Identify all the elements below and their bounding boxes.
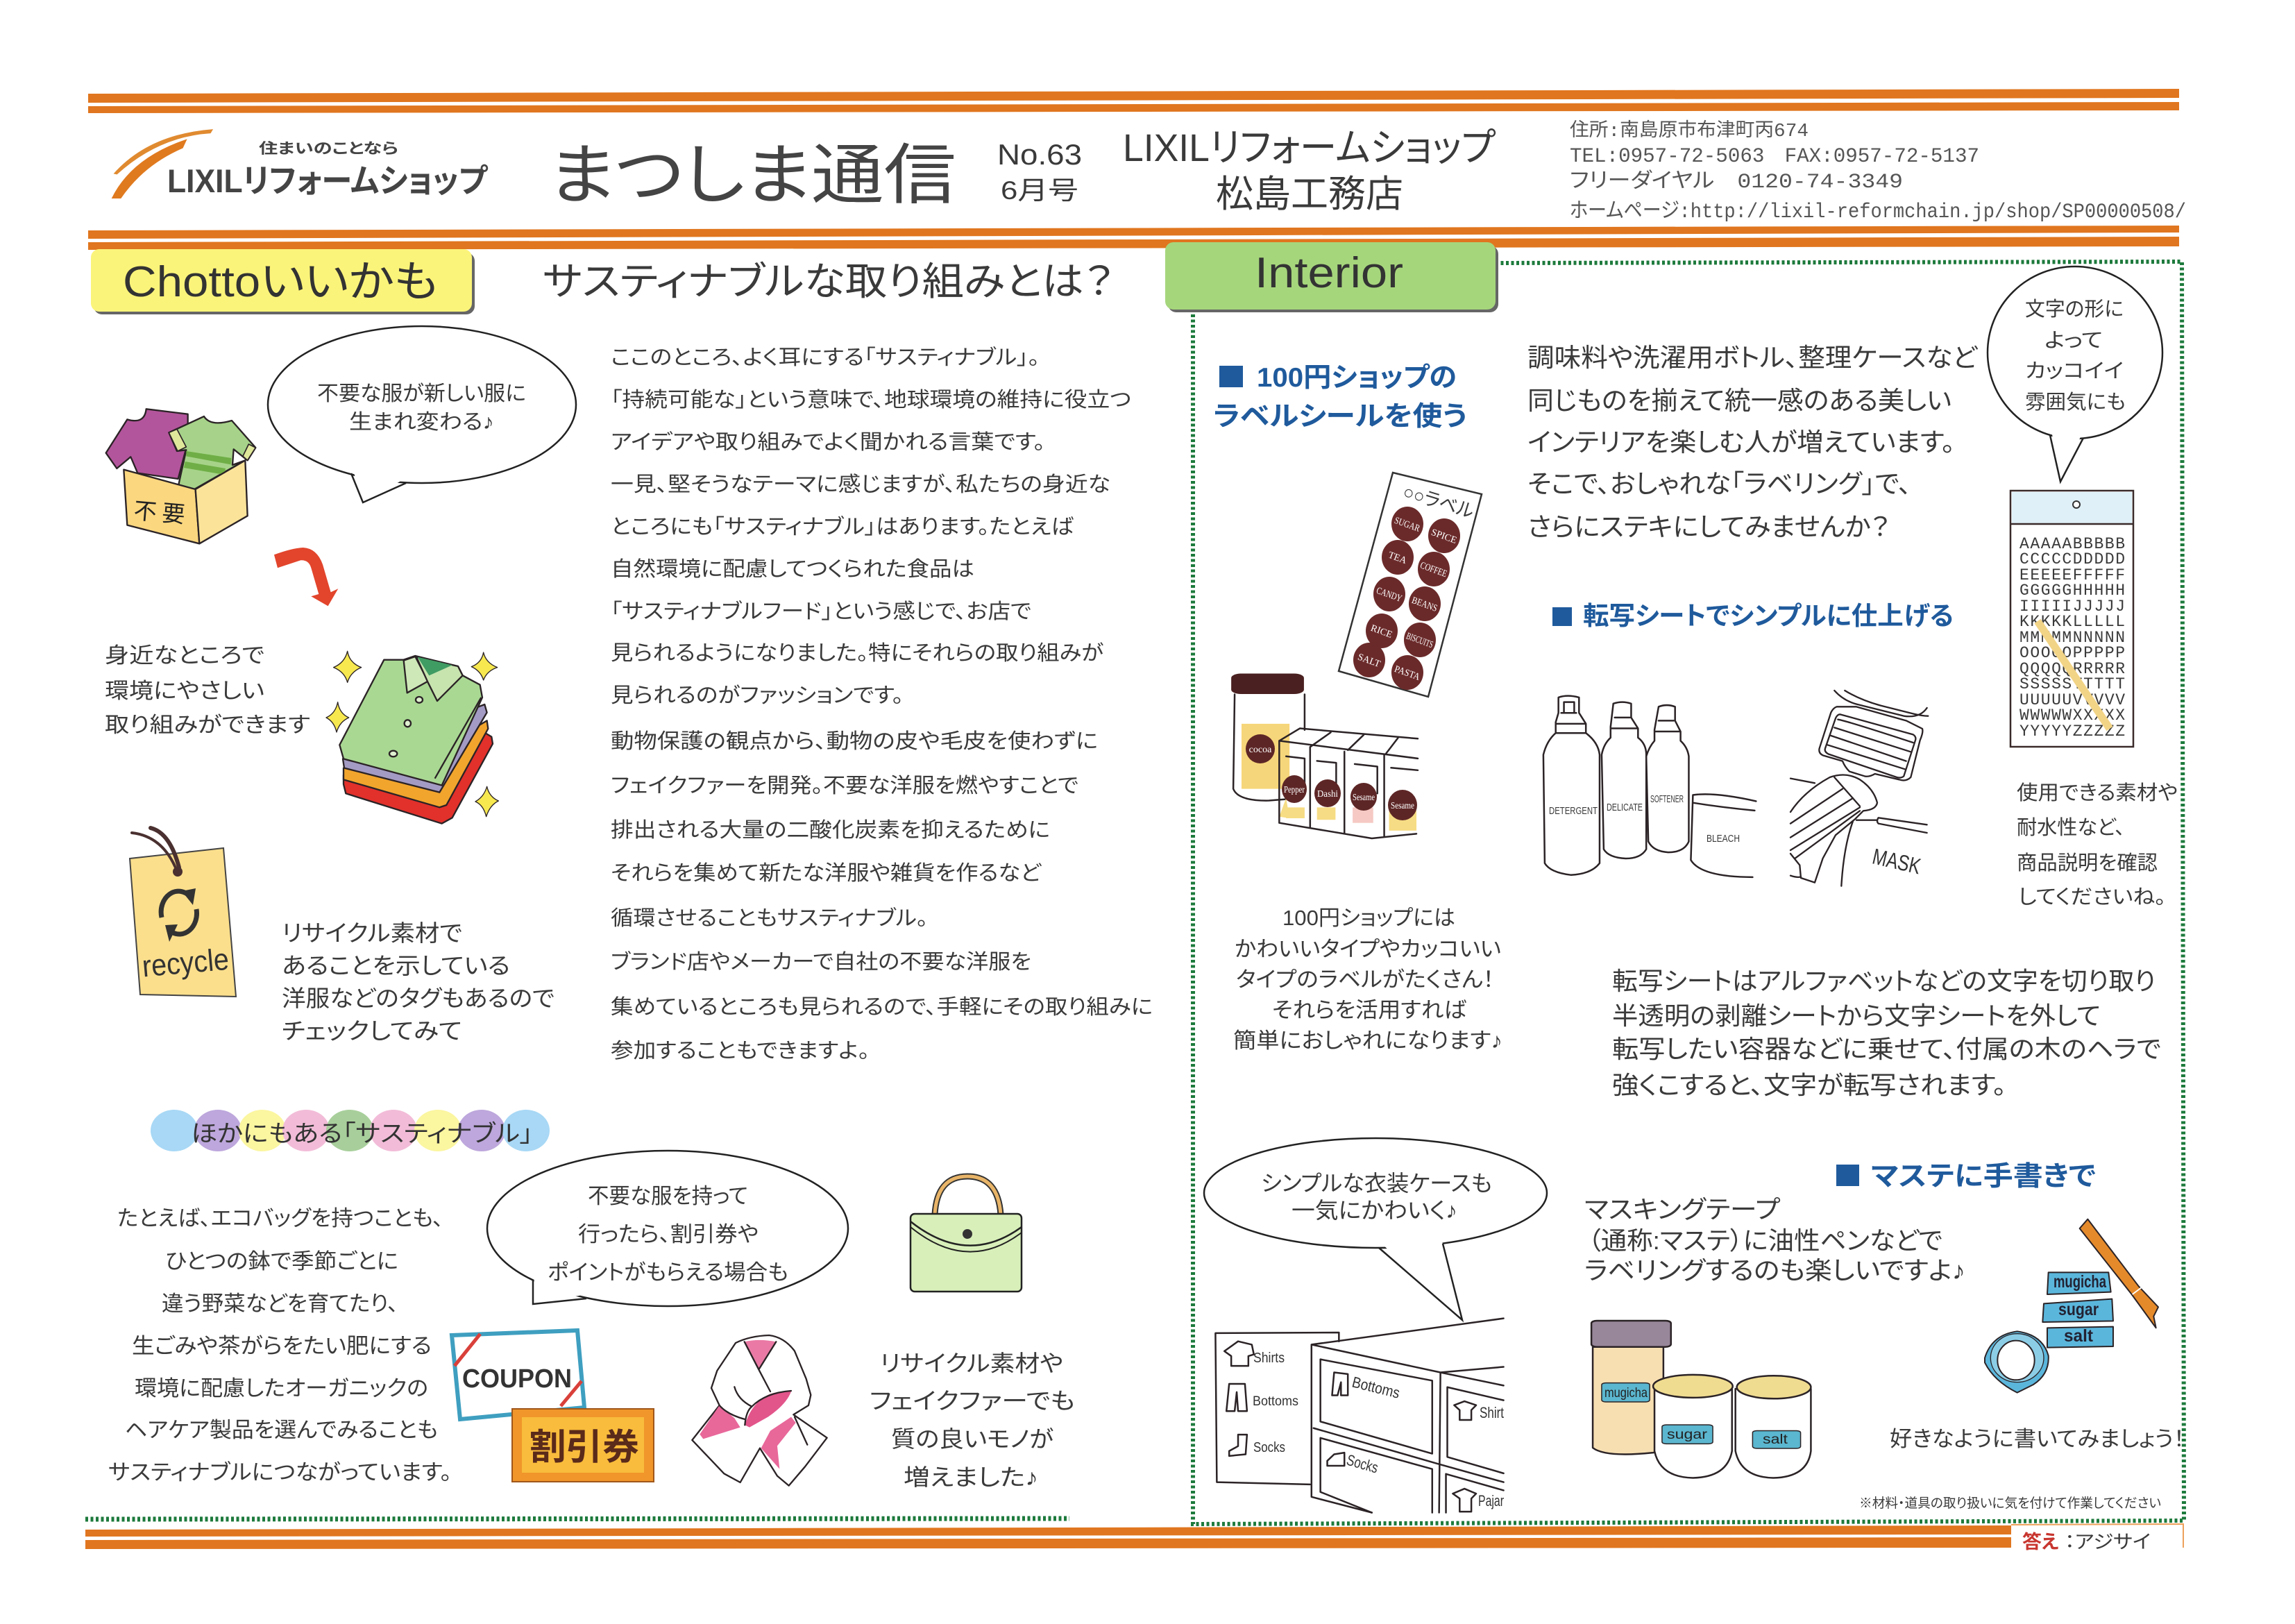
header band [88, 89, 2186, 250]
text: quality recycled goods [870, 1351, 1075, 1490]
intro text: インテリアを楽しむ人が増えています。 [1527, 428, 1955, 457]
article body text: 自然環境に配慮してつくられた食品は [611, 558, 974, 581]
dotted green frame [1193, 262, 2184, 1524]
illustration: labelled jars and boxes: Sesame [1353, 793, 1375, 803]
illustration: labelled jars and boxes [1231, 674, 1418, 838]
illustration: transfer letter sheet: OOOOOPPPPP [2019, 644, 2125, 662]
speech bubble: clothes reborn [268, 326, 576, 502]
shop name: 松島工務店 [1216, 174, 1403, 215]
article body text: フェイクファーを開発。不要な洋服を燃やすことで [611, 775, 1078, 797]
illustration: label sheet: CANDY [1375, 586, 1403, 604]
illustration: labelled jars and boxes: Pepper [1284, 785, 1305, 795]
illustration: coupon and discount ticket: 割引券 [530, 1428, 639, 1468]
speech bubble: coupons: 不要な服を持って [588, 1184, 748, 1208]
heading: 100 yen labels [1213, 363, 1467, 432]
text: 100 yen shop labels: かわいいタイプやカッコいい [1235, 937, 1501, 961]
illustration: label sheet: COFFEE [1419, 561, 1448, 580]
speech bubble: costume cases: シンプルな衣装ケースも [1261, 1171, 1492, 1196]
heading: masking tape: マステに手書きで [1871, 1162, 2096, 1192]
text: masking tape intro: （通称:マステ）に油性ペンなどで [1588, 1226, 1942, 1255]
subheading: other sustainable things: ほかにもある「サスティナブル」 [191, 1121, 533, 1147]
illustration: clothing cases with labels: Shirt [1480, 1404, 1504, 1421]
illustration: label sheet: SALT [1356, 652, 1382, 670]
intro text: さらにステキにしてみませんか？ [1527, 513, 1890, 541]
illustration: box of unwanted clothes [106, 409, 255, 543]
speech bubble: costume cases: 一気にかわいく♪ [1292, 1198, 1457, 1223]
text: other examples: ヘアケア製品を選んでみることも [125, 1418, 438, 1442]
speech bubble: costume cases [1204, 1138, 1547, 1320]
article body text: 見られるのがファッションです。 [611, 684, 904, 707]
illustration: transfer letter sheet: SSSSSTTTTT [2019, 675, 2125, 693]
illustration: detergent bottles: BLEACH [1707, 833, 1740, 845]
text: masking tape intro: ラベリングするのも楽しいですよ♪ [1584, 1256, 1965, 1285]
contact details: 住所:南島原市布津町丙674 [1570, 119, 1809, 142]
text: recycled tags: あることを示している [282, 953, 510, 979]
illustration: transfer letter sheet: UUUUUVVVVV [2019, 691, 2125, 709]
heading: 100 yen labels: ラベルシールを使う [1213, 402, 1467, 432]
heading: transfer sheet: 転写シートでシンプルに仕上げる [1583, 602, 1954, 630]
speech bubble: letter shapes [1988, 267, 2162, 482]
text: write as you like: 好きなように書いてみましょう！ [1890, 1427, 2185, 1451]
article body text: ところにも「サスティナブル」はあります。たとえば [611, 516, 1074, 539]
illustration: jars with masking tape: salt [1763, 1432, 1788, 1447]
lower orange stripes [88, 226, 2179, 250]
tab: Chottoいいかも [91, 249, 475, 314]
illustration: transfer letter sheet: AAAAABBBBB [2019, 535, 2125, 553]
text: eco-friendly nearby: 取り組みができます [105, 713, 310, 737]
text: how transfer sheets work: 転写したい容器などに乗せて、付属の木のヘラで [1612, 1035, 2161, 1063]
tab: Interior: Interior [1255, 249, 1403, 297]
illustration: clothing cases with labels: Socks [1345, 1451, 1380, 1476]
speech bubble: coupons: 行ったら、割引券や [578, 1222, 759, 1246]
text: masking tape intro [1584, 1195, 1965, 1285]
illustration: detergent bottles [1543, 696, 1756, 877]
subheading: other sustainable things [151, 1110, 550, 1151]
text: how transfer sheets work: 転写シートはアルファベットなどの文字を切り取り [1612, 967, 2156, 995]
speech bubble: letter shapes: 雰囲気にも [2025, 391, 2126, 414]
contact details: フリーダイヤル 0120-74-3349 [1570, 169, 1903, 194]
illustration: clothing cases with labels: Bottoms [1350, 1373, 1402, 1402]
footer [85, 1524, 2183, 1553]
illustration: clothing cases with labels: Pajar [1478, 1492, 1504, 1509]
issue number: 6月号 [1001, 176, 1078, 205]
article body text: 排出される大量の二酸化炭素を抑えるために [611, 819, 1050, 842]
text: quality recycled goods: フェイクファーでも [870, 1388, 1075, 1414]
illustration: clothing cases with labels: Shirts [1253, 1351, 1285, 1366]
illustration: fur scarf [692, 1335, 827, 1486]
title: まつしま通信 [548, 139, 956, 212]
intro text: 同じものを揃えて統一感のある美しい [1527, 387, 1951, 415]
article body text: 「サスティナブルフード」という感じで、お店で [611, 600, 1031, 623]
logo: LIXIL Reform Shop: LIXILリフォームショップ [167, 162, 489, 199]
speech bubble: letter shapes: カッコイイ [2025, 360, 2124, 382]
text: other examples [108, 1206, 452, 1485]
text: 100 yen shop labels: 100円ショップには [1282, 906, 1455, 930]
text: quality recycled goods: 増えました♪ [904, 1464, 1038, 1490]
article body text: 循環させることもサスティナブル。 [611, 907, 928, 930]
text: recycled tags [282, 920, 554, 1044]
illustration: tape, labels and pen: salt [2064, 1326, 2094, 1346]
illustration: recycle tag: recycle [141, 942, 230, 983]
illustration: detergent bottles: DETERGENT [1549, 805, 1598, 817]
text: check materials: 使用できる素材や [2017, 781, 2178, 804]
text: other examples: サスティナブルにつながっています。 [108, 1460, 452, 1485]
tab: Chottoいいかも: Chottoいいかも [123, 258, 438, 306]
answer box [2011, 1524, 2183, 1553]
illustration: label sheet: BEANS [1410, 595, 1439, 614]
heading: 100 yen labels: 100円ショップの [1257, 363, 1457, 393]
speech bubble: letter shapes: よって [2044, 330, 2103, 352]
note: handle materials carefully: ※材料・道具の取り扱いに気を付けて作業してください [1859, 1496, 2161, 1511]
issue number [997, 138, 1082, 205]
intro text: 調味料や洗濯用ボトル、整理ケースなど [1527, 344, 1978, 372]
text: 100 yen shop labels: それらを活用すれば [1272, 998, 1467, 1022]
article body text: ブランド店やメーカーで自社の不要な洋服を [611, 951, 1031, 974]
article body text: 一見、堅そうなテーマに感じますが、私たちの身近な [611, 473, 1110, 496]
text: recycled tags: チェックしてみて [282, 1018, 462, 1044]
panel: Chotto iikamo [85, 249, 1153, 1519]
illustration: clothing cases with labels: Bottoms [1253, 1394, 1298, 1409]
text: 100 yen shop labels: 簡単におしゃれになります♪ [1233, 1029, 1502, 1053]
text: quality recycled goods: 質の良いモノが [891, 1426, 1054, 1452]
illustration: coupon and discount ticket: COUPON [462, 1364, 572, 1394]
illustration: transfer letter sheet: WWWWWXXXXX [2019, 707, 2125, 725]
logo: LIXIL Reform Shop [112, 129, 489, 199]
article body text: それらを集めて新たな洋服や雑貨を作るなど [611, 862, 1042, 885]
illustration: label sheet: ○○ラベル [1400, 481, 1476, 523]
text: how transfer sheets work: 半透明の剥離シートから文字シートを外して [1612, 1001, 2101, 1030]
text: quality recycled goods: リサイクル素材や [880, 1351, 1063, 1376]
logo: LIXIL Reform Shop: 住まいのことなら [259, 141, 398, 157]
text: other examples: ひとつの鉢で季節ごとに [165, 1249, 398, 1274]
illustration: jars with masking tape: mugicha [1604, 1386, 1648, 1401]
illustration: tape, labels and pen [1985, 1219, 2158, 1393]
text: other examples: 違う野菜などを育てたり、 [162, 1292, 398, 1316]
illustration: label sheet [1339, 473, 1482, 697]
text: check materials [2017, 781, 2178, 908]
illustration: clothing cases with labels: Socks [1253, 1440, 1285, 1455]
text: recycled tags: リサイクル素材で [282, 920, 462, 946]
illustration: transfer letter sheet: IIIIIJJJJJ [2019, 598, 2125, 616]
contact details [1570, 119, 2186, 224]
bottom orange stripes [85, 1525, 2011, 1549]
text: other examples: 生ごみや茶がらをたい肥にする [132, 1334, 432, 1358]
text: masking tape intro: マスキングテープ [1584, 1195, 1781, 1224]
intro text [1527, 344, 1978, 541]
article body text: 見られるようになりました。特にそれらの取り組みが [611, 642, 1104, 665]
tab: Interior [1165, 242, 1498, 312]
illustration: label sheet: BISCUITS [1405, 632, 1434, 650]
article body text: 動物保護の観点から、動物の皮や毛皮を使わずに [611, 730, 1098, 753]
answer box: ：アジサイ [2065, 1532, 2151, 1553]
text: 100 yen shop labels: タイプのラベルがたくさん！ [1236, 967, 1494, 992]
illustration: labelled jars and boxes: Dashi [1317, 789, 1338, 800]
issue number: No.63 [997, 138, 1082, 171]
illustration: transfer letter sheet: EEEEEFFFFF [2019, 566, 2125, 584]
illustration: box of unwanted clothes: 不要 [133, 498, 186, 527]
illustration: transfer letter sheet: MMMMMNNNNN [2019, 629, 2125, 647]
article body text [611, 346, 1153, 1063]
shop name [1123, 126, 1496, 215]
speech bubble: coupons: ポイントがもらえる場合も [548, 1260, 788, 1285]
illustration: jars with masking tape [1591, 1321, 1811, 1478]
illustration: transfer letter sheet: GGGGGHHHHH [2019, 582, 2125, 600]
speech bubble: clothes reborn: 生まれ変わる♪ [349, 411, 494, 434]
illustration: transfer letter sheet: YYYYYZZZZZ [2019, 722, 2125, 741]
arrow: red [274, 548, 338, 606]
text: check materials: 耐水性など、 [2017, 816, 2125, 839]
illustration: detergent bottles: DELICATE [1607, 802, 1643, 813]
text: other examples: たとえば、エコバッグを持つことも、 [117, 1206, 443, 1230]
intro text: そこで、おしゃれな「ラベリング」で、 [1527, 470, 1911, 498]
illustration: mask and case: MASK [1870, 844, 1923, 879]
illustration: folded shirts with sparkles [326, 651, 498, 824]
illustration: eco bag [911, 1176, 1022, 1292]
illustration: label sheet: SPICE [1430, 527, 1458, 546]
text: eco-friendly nearby [105, 643, 310, 737]
illustration: clothing cases with labels [1215, 1319, 1504, 1512]
text: recycled tags: 洋服などのタグもあるので [282, 986, 554, 1011]
illustration: label sheet: RICE [1369, 623, 1394, 641]
panel: Interior [1165, 242, 2185, 1524]
illustration: jars with masking tape: sugar [1667, 1428, 1708, 1442]
illustration: label sheet: PASTA [1393, 664, 1422, 683]
text: eco-friendly nearby: 身近なところで [105, 643, 264, 668]
answer box: 答え [2022, 1531, 2059, 1553]
contact details: ホームページ:http://lixil-reformchain.jp/shop/SP00000508/ [1570, 201, 2186, 224]
illustration: transfer letter sheet: CCCCCDDDDD [2019, 550, 2125, 568]
shop name: LIXILリフォームショップ [1123, 126, 1496, 169]
heading: サスティナブルな取り組みとは？ [543, 260, 1114, 303]
illustration: transfer letter sheet: KKKKKLLLLL [2019, 613, 2125, 631]
article body text: 参加することもできますよ。 [611, 1040, 870, 1063]
article body text: ここのところ、よく耳にする「サスティナブル」。 [611, 346, 1040, 369]
text: other examples: 環境に配慮したオーガニックの [135, 1376, 428, 1401]
illustration: recycle tag [130, 828, 236, 997]
illustration: label sheet: TEA [1387, 550, 1409, 566]
illustration: label sheet: SUGAR [1393, 516, 1421, 534]
speech bubble: letter shapes: 文字の形に [2025, 298, 2124, 321]
illustration: tape, labels and pen: mugicha [2053, 1272, 2107, 1292]
text: check materials: 商品説明を確認 [2017, 852, 2158, 874]
contact details: TEL:0957-72-5063 FAX:0957-72-5137 [1570, 145, 1979, 169]
illustration: transfer letter sheet [2010, 491, 2133, 747]
text: 100 yen shop labels [1233, 906, 1502, 1053]
illustration: tape, labels and pen: sugar [2058, 1300, 2099, 1319]
illustration: labelled jars and boxes: Sesame [1391, 801, 1414, 811]
top orange stripes [88, 89, 2179, 113]
article body text: 集めているところも見られるので、手軽にその取り組みに [611, 996, 1153, 1019]
illustration: transfer letter sheet: QQQQQRRRRR [2019, 660, 2125, 678]
article body text: アイデアや取り組みでよく聞かれる言葉です。 [611, 431, 1045, 454]
text: how transfer sheets work: 強くこすると、文字が転写されます。 [1612, 1071, 2006, 1099]
speech bubble: clothes reborn: 不要な服が新しい服に [317, 382, 526, 405]
speech bubble: coupons [487, 1151, 848, 1306]
text: eco-friendly nearby: 環境にやさしい [105, 679, 264, 703]
text: check materials: してくださいね。 [2018, 886, 2166, 908]
illustration: coupon and discount ticket [452, 1330, 654, 1482]
text: how transfer sheets work [1612, 967, 2161, 1099]
illustration: mask and case [1790, 691, 1928, 886]
article body text: 「持続可能な」という意味で、地球環境の維持に役立つ [611, 389, 1131, 412]
illustration: labelled jars and boxes: cocoa [1249, 745, 1272, 755]
illustration: detergent bottles: SOFTENER [1650, 793, 1684, 805]
